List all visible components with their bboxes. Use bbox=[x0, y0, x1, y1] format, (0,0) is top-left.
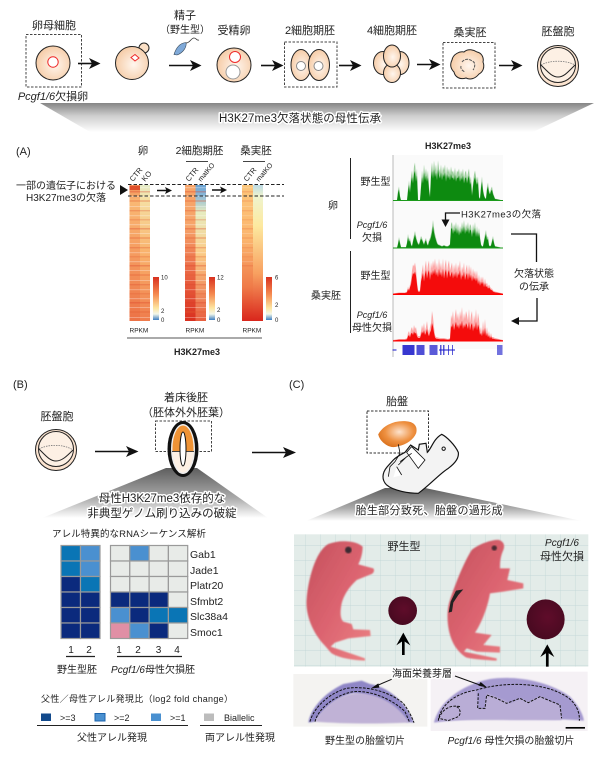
label: post-implantation embryo bbox=[142, 390, 230, 419]
labels: stage groups: 欠損 bbox=[362, 231, 382, 244]
photo: pups and placentas bbox=[294, 534, 588, 667]
label: post-implantation embryo: （胚体外外胚葉） bbox=[142, 405, 230, 419]
labels: stage groups: Pcgf1/6 bbox=[357, 310, 387, 320]
labels: stages bbox=[138, 144, 272, 157]
callout: partial loss bbox=[16, 179, 116, 204]
label: wild type: （野生型） bbox=[160, 23, 210, 36]
heatmap: wild type bbox=[61, 546, 100, 638]
colour scales: 10 bbox=[161, 276, 168, 282]
icon: morula bbox=[451, 50, 484, 79]
labels: embryo numbers: 1 bbox=[116, 645, 122, 656]
labels: embryo numbers: 3 bbox=[156, 645, 162, 656]
labels: stages: 卵 bbox=[138, 144, 148, 157]
labels: genes: Jade1 bbox=[190, 565, 219, 577]
heatmap: 2-cell embryo bbox=[185, 185, 206, 321]
labels: genes: Gab1 bbox=[190, 549, 216, 561]
labels: embryo numbers: 4 bbox=[174, 645, 180, 656]
label: placenta: 胎盤 bbox=[386, 394, 408, 408]
labels: RPKM: RPKM bbox=[186, 328, 204, 334]
panel B bbox=[13, 379, 296, 744]
legend: 父性アレル発現 bbox=[77, 731, 147, 744]
heatmap: morula bbox=[242, 185, 263, 321]
labels: genes: Smoc1 bbox=[190, 627, 223, 639]
labels: stage groups: Pcgf1/6 bbox=[357, 220, 387, 230]
legend bbox=[37, 693, 275, 744]
track: morula maternal deficient bbox=[393, 307, 503, 342]
colour scales: 0 bbox=[217, 318, 221, 324]
labels: genotypes: 野生型胚 bbox=[57, 663, 97, 676]
sample labels bbox=[128, 162, 275, 183]
mouse: wild type bbox=[306, 541, 374, 661]
heading: blastocyst: 胚盤胞 bbox=[542, 24, 574, 38]
label: wild type photo: 野生型 bbox=[388, 539, 420, 553]
dashed region bbox=[128, 184, 284, 196]
icon: 2-cell embryo bbox=[291, 50, 330, 80]
dashed box bbox=[156, 421, 212, 452]
heading: 4-cell embryo: 4細胞期胚 bbox=[367, 23, 417, 37]
colour scales: 0 bbox=[161, 318, 165, 324]
banner: imprinting disruption bbox=[42, 468, 268, 520]
icon: fetus and placenta bbox=[378, 421, 458, 493]
colour scales: 6 bbox=[275, 276, 279, 282]
dashed box: morula bbox=[443, 42, 495, 88]
arrow bbox=[95, 446, 138, 457]
labels: genes: Slc38a4 bbox=[190, 611, 228, 623]
callout: partial loss: 一部の遺伝子における bbox=[16, 179, 116, 192]
arrow: transmission: 欠落状態 bbox=[514, 267, 554, 280]
labels: stage groups: 野生型 bbox=[360, 269, 390, 282]
label: H3K27me3: H3K27me3 bbox=[174, 347, 220, 357]
labels: stages: 桑実胚 bbox=[240, 144, 272, 157]
legend: 父性／母性アレル発現比（log2 fold change） bbox=[41, 693, 233, 704]
labels: stage groups: 卵 bbox=[328, 199, 338, 212]
labels: RPKM: RPKM bbox=[242, 328, 261, 334]
colour scales: 2 bbox=[161, 309, 165, 315]
legend: >=3 bbox=[60, 713, 76, 723]
banner: lethality and hyperplasia bbox=[306, 488, 582, 521]
callout: partial loss: H3K27me3の欠落 bbox=[26, 191, 106, 204]
arrow bbox=[261, 60, 284, 71]
scale bar bbox=[566, 727, 585, 729]
heading: RNA-seq: アレル特異的なRNAシーケンス解析 bbox=[52, 528, 206, 540]
panel: genome tracks bbox=[311, 141, 554, 357]
arrow: transmission bbox=[511, 234, 554, 325]
track: morula wild type bbox=[393, 258, 503, 295]
gene models bbox=[392, 345, 502, 355]
arrow bbox=[499, 60, 522, 71]
heatmap: oocyte bbox=[130, 185, 150, 321]
legend: >=2 bbox=[114, 713, 130, 723]
labels: embryo numbers: 2 bbox=[135, 645, 141, 656]
labels: stages: 2細胞期胚 bbox=[176, 144, 224, 157]
callout: H3K27me3 loss bbox=[442, 208, 541, 227]
panel: maternal transmission timeline bbox=[18, 9, 578, 103]
labels: genes: Sfmbt2 bbox=[190, 596, 223, 608]
histology bbox=[293, 672, 588, 731]
dashed box bbox=[367, 411, 428, 453]
arrows between stages bbox=[157, 186, 227, 194]
label: post-implantation embryo: 着床後胚 bbox=[164, 390, 208, 404]
labels: genes bbox=[190, 549, 228, 639]
label: knockout photo: 母性欠損 bbox=[540, 549, 584, 563]
colour scales: 12 bbox=[217, 276, 224, 282]
placenta: wild type bbox=[388, 596, 417, 625]
labels: stage groups: 野生型 bbox=[360, 175, 390, 188]
section: wild type bbox=[308, 681, 414, 724]
labels: embryo numbers bbox=[68, 645, 180, 656]
banner: imprinting disruption: 非典型ゲノム刷り込みの破綻 bbox=[87, 506, 237, 520]
arrow bbox=[417, 59, 440, 70]
marker triangle bbox=[120, 185, 128, 195]
colour scales bbox=[153, 276, 279, 324]
labels: RPKM: RPKM bbox=[130, 328, 148, 334]
heading: morula: 桑実胚 bbox=[454, 26, 486, 39]
labels: stage groups: 母性欠損 bbox=[352, 321, 392, 334]
labels: embryo numbers: 1 bbox=[68, 645, 74, 656]
colour scales: 0 bbox=[275, 318, 279, 324]
legend: Biallelic bbox=[224, 713, 255, 723]
labels: genotypes: Pcgf1/6母性欠損胚 bbox=[111, 663, 195, 676]
arrows: trophoblast bbox=[371, 676, 487, 688]
labels: genotypes bbox=[57, 663, 195, 676]
heading: oocyte: 卵母細胞 bbox=[32, 18, 76, 32]
icon: embryo bbox=[168, 421, 198, 477]
track: egg Pcgf1/6 deficient bbox=[393, 220, 503, 248]
arrow bbox=[339, 60, 362, 71]
icon: blastocyst bbox=[36, 430, 76, 470]
arrow bbox=[78, 58, 100, 69]
heading: 2-cell embryo: 2細胞期胚 bbox=[285, 23, 335, 37]
label: knockout photo: Pcgf1/6 bbox=[545, 538, 579, 549]
panel C bbox=[289, 379, 588, 747]
label: B: (B) bbox=[13, 379, 28, 391]
dashed box: oocyte bbox=[26, 34, 82, 87]
arrow bbox=[169, 60, 202, 71]
sample labels: KO bbox=[140, 169, 154, 183]
banner: lethality and hyperplasia: 胎生部分致死、胎盤の過形成 bbox=[356, 503, 502, 517]
sample labels: CTR bbox=[128, 165, 145, 183]
labels: genes: Platr20 bbox=[190, 580, 223, 592]
icon: oocyte bbox=[36, 46, 70, 80]
colour scales: 2 bbox=[217, 308, 221, 314]
label: knockout photo bbox=[540, 538, 584, 563]
sample labels: matKO bbox=[255, 162, 275, 183]
label: knockout section: Pcgf1/6 母性欠損の胎盤切片 bbox=[448, 734, 574, 747]
labels: RPKM bbox=[130, 328, 261, 334]
banner: imprinting disruption: 母性H3K27me3依存的な bbox=[99, 491, 225, 505]
labels: stage groups bbox=[311, 175, 392, 334]
label: panel A: (A) bbox=[16, 146, 31, 158]
banner: maternal inheritance bbox=[40, 103, 594, 132]
heading: tracks: H3K27me3 bbox=[425, 141, 471, 151]
panel: heatmaps bbox=[16, 144, 284, 357]
labels: stage groups: 桑実胚 bbox=[311, 289, 341, 302]
track: egg wild type bbox=[393, 160, 503, 201]
arrow: wild type placenta bbox=[396, 633, 410, 655]
sample labels: CTR bbox=[242, 165, 259, 183]
sample labels: matKO bbox=[197, 162, 217, 183]
legend: 両アレル性発現 bbox=[205, 731, 275, 744]
icon: sperm bbox=[174, 38, 199, 55]
label: C: (C) bbox=[289, 379, 304, 391]
arrow: transmission: の伝承 bbox=[519, 281, 549, 293]
heading: sperm: 精子 bbox=[174, 9, 196, 22]
arrow: knockout placenta bbox=[540, 644, 554, 667]
heading: fertilized egg: 受精卵 bbox=[218, 23, 250, 37]
label: blastocyst: 胚盤胞 bbox=[40, 409, 74, 423]
icon: egg with polar body bbox=[116, 43, 149, 80]
section: maternal knockout bbox=[434, 678, 584, 723]
icon: 4-cell embryo bbox=[374, 45, 409, 82]
dashed box: 2-cell bbox=[284, 42, 337, 87]
mouse: maternal knockout bbox=[448, 540, 523, 661]
icon: blastocyst bbox=[538, 46, 578, 86]
placenta: maternal knockout bbox=[527, 599, 565, 639]
legend: >=1 bbox=[170, 713, 186, 723]
label: spongiotrophoblast: 海面栄養芽層 bbox=[392, 667, 452, 680]
banner: maternal inheritance: H3K27me3欠落状態の母性伝承 bbox=[219, 111, 382, 125]
labels: embryo numbers: 2 bbox=[86, 645, 92, 656]
label: Pcgf1/6 deficient oocyte: Pcgf1/6欠損卵 bbox=[18, 89, 88, 103]
icon: fertilized egg bbox=[217, 48, 251, 82]
callout: H3K27me3 loss: H3K27me3の欠落 bbox=[461, 208, 541, 220]
sample labels: CTR bbox=[184, 165, 201, 183]
colour scales: 2 bbox=[275, 303, 279, 309]
group lines bbox=[350, 158, 352, 333]
label: wild-type section: 野生型の胎盤切片 bbox=[325, 734, 405, 747]
heatmap: maternal knockout bbox=[110, 546, 188, 638]
arrow bbox=[252, 447, 296, 458]
